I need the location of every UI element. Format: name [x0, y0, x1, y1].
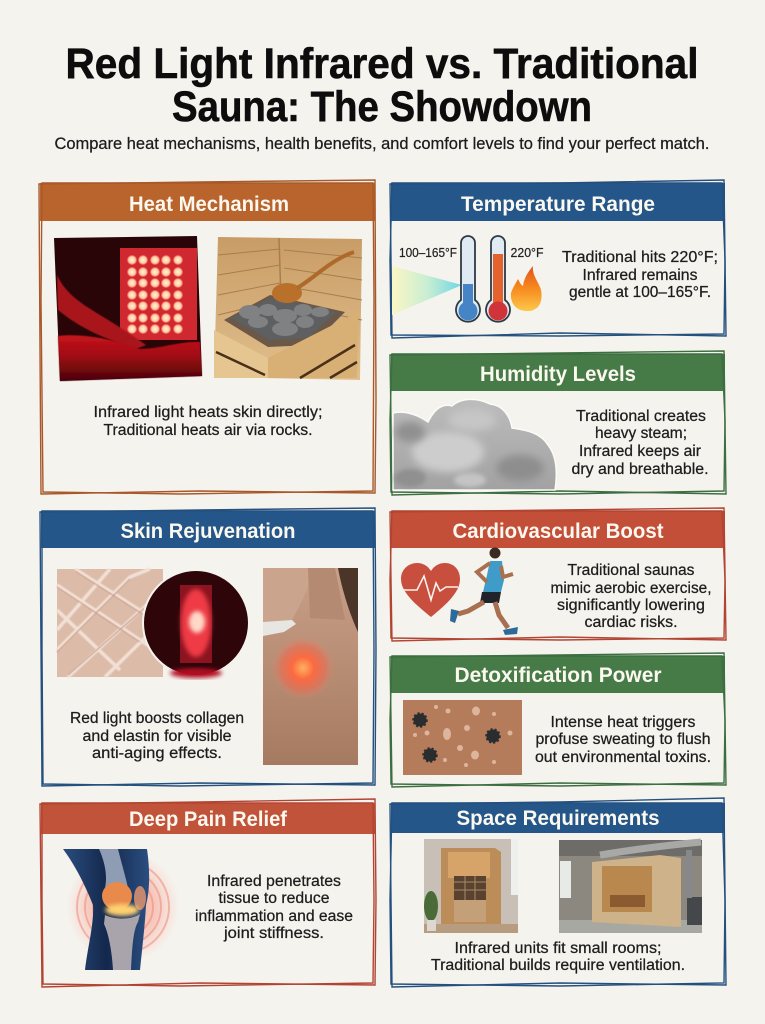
- text: detoxification power: [535, 714, 711, 766]
- heading: cardiovascular boost: Cardiovascular Boost: [452, 520, 664, 543]
- heading: heat mechanism: Heat Mechanism: [129, 193, 289, 216]
- text: deep pain relief: [195, 873, 353, 942]
- text: temperature range: [562, 249, 718, 301]
- text: space requirements: [431, 940, 685, 974]
- text: humidity levels: heavy steam;: [595, 425, 687, 442]
- text: skin rejuvenation: Red light boosts collagen: [70, 710, 244, 727]
- text: detoxification power: out environmental toxins.: [535, 749, 711, 766]
- panel: detoxification power: [390, 653, 726, 787]
- image: glowing shoulder: [263, 568, 358, 765]
- text: skin rejuvenation: [70, 710, 244, 762]
- heading: space requirements: Space Requirements: [456, 807, 660, 830]
- image: red light device in circle: [142, 569, 250, 678]
- icon: flame: [511, 266, 542, 311]
- heading: deep pain relief: Deep Pain Relief: [129, 808, 288, 831]
- heading: temperature range: Temperature Range: [461, 193, 655, 216]
- text: skin rejuvenation: and elastin for visible: [82, 728, 232, 745]
- text: cardiovascular boost: Traditional saunas: [568, 562, 695, 579]
- panel: space requirements: [390, 798, 726, 987]
- title: Sauna: The Showdown: [172, 83, 592, 131]
- image: glowing knee joint: [63, 849, 180, 970]
- text: cardiovascular boost: [550, 562, 712, 631]
- text: space requirements: Infrared units fit small rooms;: [454, 940, 662, 957]
- image: sweat droplets and toxins: [403, 700, 522, 775]
- text: humidity levels: dry and breathable.: [572, 461, 708, 478]
- icon: light cone: [392, 266, 462, 315]
- text: detoxification power: Intense heat triggers: [550, 714, 696, 731]
- image: compact infrared cabin: [424, 839, 518, 933]
- text: detoxification power: profuse sweating to flush: [536, 731, 710, 748]
- image: collagen fibres: [57, 569, 163, 677]
- text: deep pain relief: joint stiffness.: [223, 925, 324, 942]
- icon: running man: [450, 548, 518, 635]
- label: traditional temperature: 220°F: [510, 246, 544, 260]
- label: infrared range: 100–165°F: [399, 246, 457, 260]
- text: deep pain relief: tissue to reduce: [218, 890, 330, 907]
- text: heat mechanism: Traditional heats air via rocks.: [104, 422, 312, 439]
- subtitle: Compare heat mechanisms, health benefits, and comfort levels to find your perfect match.: [54, 135, 710, 153]
- text: humidity levels: [572, 408, 708, 478]
- panel: deep pain relief: [40, 799, 376, 987]
- text: deep pain relief: inflammation and ease: [195, 908, 353, 925]
- icon: heart with pulse: [401, 563, 460, 617]
- text: temperature range: Infrared remains: [582, 267, 698, 284]
- panel: heat mechanism: [39, 180, 376, 494]
- text: heat mechanism: [94, 404, 322, 439]
- image: steam cloud: [393, 399, 556, 490]
- panel: temperature range: [390, 180, 726, 338]
- icon: red thermometer: [486, 236, 510, 322]
- text: temperature range: gentle at 100–165°F.: [569, 284, 711, 301]
- image: sauna rocks and ladle: [214, 237, 362, 380]
- icon: blue thermometer: [456, 236, 480, 322]
- text: humidity levels: Infrared keeps air: [579, 443, 701, 460]
- panel: skin rejuvenation: [40, 508, 376, 786]
- heading: detoxification power: Detoxification Power: [454, 664, 662, 687]
- text: cardiovascular boost: mimic aerobic exercise,: [550, 580, 712, 597]
- panel: cardiovascular boost: [390, 508, 726, 641]
- text: space requirements: Traditional builds require ventilation.: [431, 957, 685, 974]
- text: cardiovascular boost: significantly lowering: [557, 597, 705, 614]
- text: skin rejuvenation: anti-aging effects.: [92, 745, 222, 762]
- title: Red Light Infrared vs. Traditional: [66, 40, 698, 88]
- image: built-in traditional sauna: [559, 840, 702, 933]
- text: cardiovascular boost: cardiac risks.: [584, 614, 678, 631]
- heading: humidity levels: Humidity Levels: [480, 363, 636, 386]
- image: red light panel with arm: [54, 236, 202, 381]
- heading: skin rejuvenation: Skin Rejuvenation: [120, 520, 296, 543]
- panel: humidity levels: [390, 351, 726, 495]
- title: [66, 40, 698, 131]
- text: deep pain relief: Infrared penetrates: [207, 873, 341, 890]
- text: humidity levels: Traditional creates: [576, 408, 706, 425]
- text: temperature range: Traditional hits 220°F;: [562, 249, 718, 266]
- text: heat mechanism: Infrared light heats skin directly;: [94, 404, 322, 421]
